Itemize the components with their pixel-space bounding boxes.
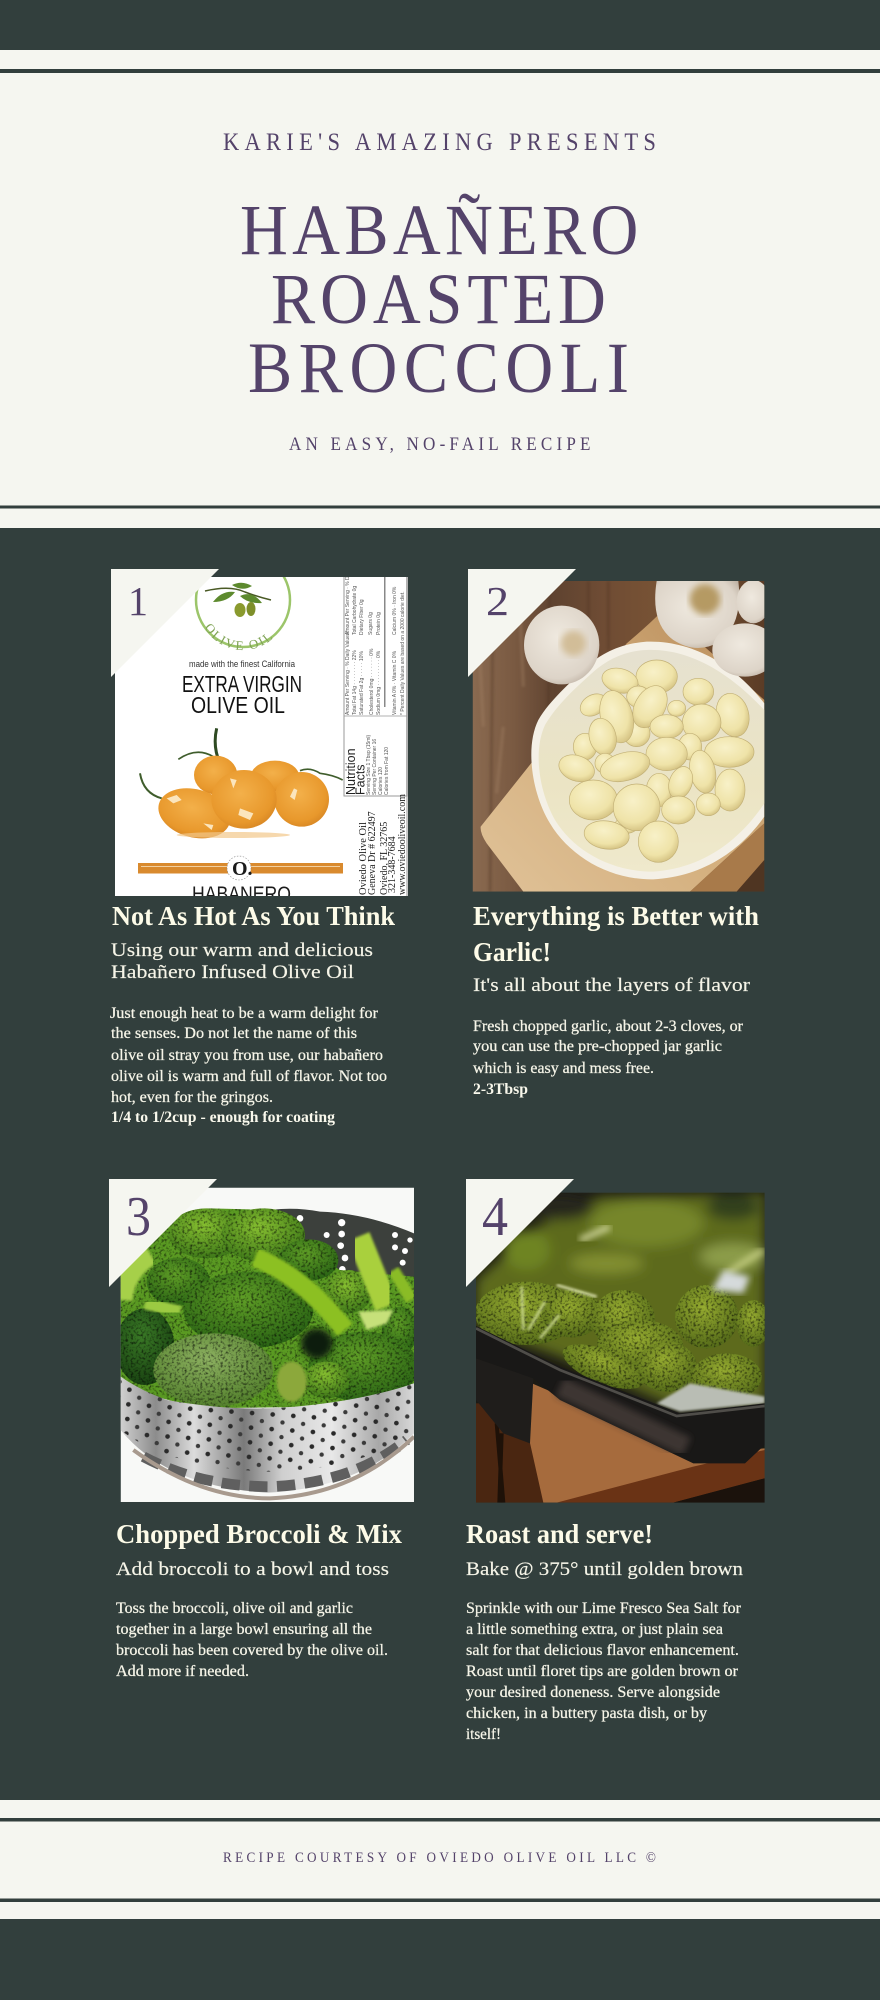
nutrition facts table: Total Carbohydrate 0g [352,586,358,635]
producer address: 321-348-7684 [387,836,398,893]
broccoli stems [121,1237,412,1407]
cutting board [481,610,764,892]
nutrition facts table: Saturated Fat 2g · · · · · 10% [359,651,365,715]
eyebrow: presenter: KARIE'S AMAZING PRESENTS [223,129,656,156]
image: habanero peppers [140,728,343,846]
number badge 1 [111,569,219,677]
footer credit: RECIPE COURTESY OF OVIEDO OLIVE OIL LLC © [223,1849,656,1866]
body text: Toss the broccoli, olive oil and garlic [116,1600,353,1617]
subheading: Using our warm and delicious [111,940,373,961]
panel: step 2 garlic [468,569,778,1098]
wood underneath [476,1376,765,1503]
icon: olive oil logo: OVIEDO [205,549,277,577]
subheading: Habañero Infused Olive Oil [111,962,354,983]
producer address: Oviedo, FL 32765 [379,822,390,895]
number badge 3 [109,1179,217,1287]
nutrition facts table: Cholesterol 0mg · · · · · · · 0% [369,648,375,715]
nutrition facts table: Sugars 0g [368,612,374,635]
title: ROASTED [271,258,606,339]
nutrition facts table: Calories from Fat 120 [384,747,390,795]
title [240,189,638,408]
steamer bowl [121,1377,414,1498]
nutrition facts table: Amount Per Serving · % Daily [345,568,351,635]
garlic bulbs [524,580,778,684]
header banner [0,50,880,528]
producer address: www.oviedooliveoil.com [397,794,408,895]
roasted florets [475,1282,770,1400]
subheading: It's all about the layers of flavor [473,975,751,996]
panel: step 4 roast [466,1179,770,1743]
footer banner [0,1800,880,1919]
label product name: HABANERO [192,883,291,906]
nutrition facts table: Dietary Fiber 0g [359,599,365,635]
panel: step 3 broccoli [109,1179,418,1680]
title: HABAÑERO [240,189,638,270]
image: garlic cloves in a bowl [473,580,778,892]
title: BROCCOLI [248,327,629,408]
nutrition facts table: Facts [354,764,368,795]
nutrition facts table: Vitamin A 0% · Vitamin C 0% [392,650,398,715]
nutrition facts table: Total Fat 14g · · · · · · · · 22% [352,650,358,715]
body text: together in a large bowl ensuring all the [116,1621,372,1638]
producer address: Oviedo Olive Oil [358,822,369,895]
body text: olive oil is warm and full of flavor. Not too [111,1068,387,1085]
orange divider with O badge: O. [232,858,253,880]
subheading: Add broccoli to a bowl and toss [116,1559,389,1580]
nutrition facts table: * Percent Daily Values are based on a 2000 calorie diet. [400,591,406,715]
body text [116,1600,388,1680]
number badge 1: 1 [128,578,148,624]
nutrition facts table [344,568,407,796]
nutrition facts table: Calcium 0% · Iron 0% [392,586,398,635]
body text: 1/4 to 1/2cup - enough for coating [111,1109,335,1126]
number badge 4: 4 [482,1186,508,1248]
body text: which is easy and mess free. [473,1060,654,1077]
image: habanero olive oil label [115,577,408,896]
heading [473,901,759,967]
label text: OLIVE OIL [191,692,285,718]
number badge 3: 3 [126,1186,151,1248]
body text: Fresh chopped garlic, about 2-3 cloves, or [473,1018,744,1035]
broccoli [116,1208,418,1408]
icon: olive oil logo: OLIVE OIL [206,624,272,650]
nutrition facts table: Calories 120 [378,767,384,795]
body text: Roast until floret tips are golden brown or [466,1663,739,1680]
body text: the senses. Do not let the name of this [111,1025,357,1042]
body text: salt for that delicious flavor enhancement. [466,1642,739,1659]
nutrition facts table: Serving Size 1 Tbsp (15ml) [366,734,372,795]
label text: EXTRA VIRGIN [182,671,302,697]
heading: Roast and serve! [466,1519,653,1549]
nutrition facts table: Protein 0g [376,612,382,635]
producer address [358,794,408,895]
nutrition facts table: Amount Per Serving · % Daily Values* [345,631,351,715]
panel: step 1 olive oil [110,569,408,1126]
subheading [111,940,373,983]
body text: itself! [466,1726,501,1743]
steamer back [276,1208,414,1277]
pale highlights on stems [522,1227,765,1412]
subtitle: AN EASY, NO-FAIL RECIPE [289,433,591,454]
heading: Everything is Better with [473,901,759,931]
number badge 2 [468,569,576,677]
garlic cloves [555,660,754,862]
label text [183,660,301,713]
body text [473,1018,744,1098]
body text: olive oil stray you from use, our habañero [111,1047,383,1064]
body text [466,1600,742,1743]
body text [110,1005,387,1126]
body text: Just enough heat to be a warm delight for [110,1005,379,1022]
body text: Add more if needed. [116,1663,249,1680]
body text: hot, even for the gringos. [111,1089,273,1106]
subheading: Bake @ 375° until golden brown [466,1559,744,1580]
heading: Not As Hot As You Think [112,901,395,931]
bowl [531,642,764,879]
baking tray [476,1326,765,1463]
body text: Sprinkle with our Lime Fresco Sea Salt for [466,1600,742,1617]
body text: you can use the pre-chopped jar garlic [473,1038,722,1055]
body text: chicken, in a buttery pasta dish, or by [466,1705,707,1722]
number badge 4 [466,1179,574,1287]
body text: a little something extra, or just plain sea [466,1621,723,1638]
orange divider with O badge [138,856,343,880]
image: broccoli in a steamer [116,1188,418,1502]
body text: broccoli has been covered by the olive oil. [116,1642,388,1659]
nutrition facts table: Sodium 0mg · · · · · · · · · 0% [376,650,382,715]
label text: made with the finest California [189,659,295,669]
image: roasted broccoli on a tray [475,1193,770,1503]
number badge 2: 2 [486,578,509,624]
icon: olive oil logo [194,577,292,650]
heading: Garlic! [473,937,551,967]
nutrition facts table: Nutrition [344,748,358,795]
tray surface and blurred florets [476,1193,767,1403]
heading: Chopped Broccoli & Mix [116,1519,402,1549]
body text: 2-3Tbsp [473,1081,528,1098]
body text: your desired doneness. Serve alongside [466,1684,720,1701]
nutrition facts table: Serving Per Container 16 [372,739,378,795]
producer address: Geneva Dr # 622497 [367,811,378,895]
